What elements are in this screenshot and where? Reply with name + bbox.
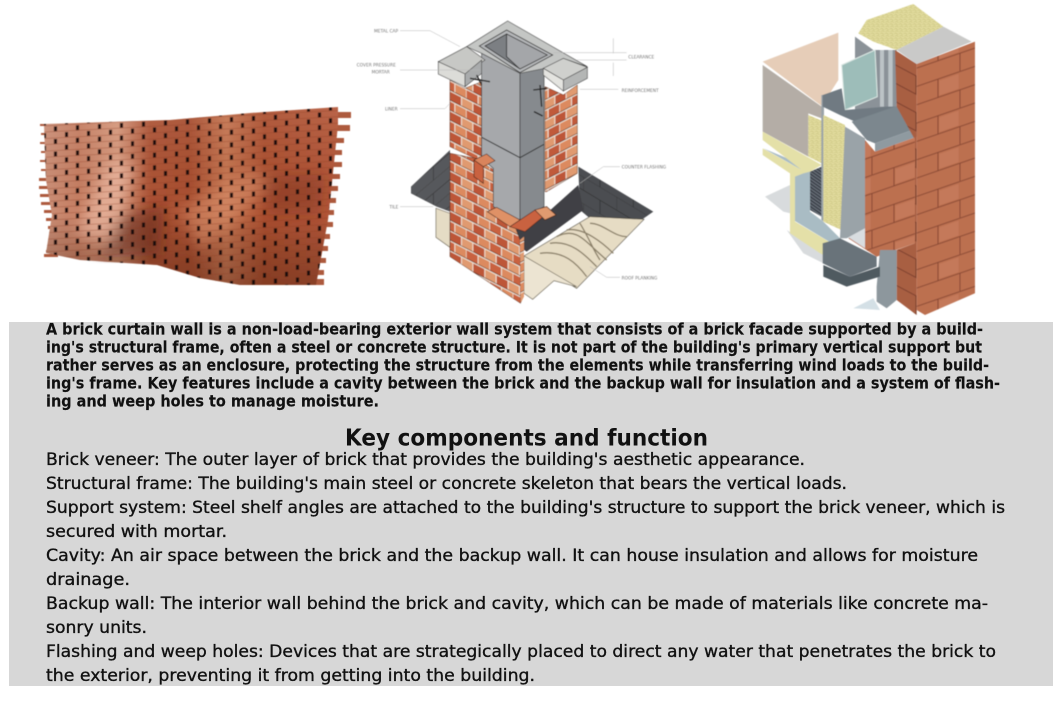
ventilation grille	[810, 167, 822, 217]
text panel background	[9, 322, 1053, 686]
wire ties	[470, 75, 547, 116]
flue opening	[479, 30, 553, 73]
concrete slab	[763, 65, 822, 157]
left pier	[450, 80, 482, 158]
intro paragraph: ing and weep holes to manage moisture.	[46, 392, 379, 410]
concrete top of brick	[897, 27, 972, 64]
lower shadow plane	[765, 185, 823, 263]
floor slab top	[763, 33, 838, 106]
component list: Structural frame: The building's main steel or concrete skeleton that bears the vertical loads.	[46, 474, 847, 494]
brick face right	[917, 42, 975, 315]
component list: sonry units.	[46, 618, 147, 638]
insulation back	[808, 115, 822, 163]
wood underside	[524, 256, 577, 299]
component list: Support system: Steel shelf angles are attached to the building's structure to support the brick veneer, which is	[46, 498, 1005, 518]
glazing	[842, 50, 893, 110]
component list: secured with mortar.	[46, 522, 227, 542]
callout labels: TILE	[388, 204, 399, 210]
dark step flashing	[515, 185, 583, 252]
wall shading	[44, 107, 338, 285]
lower ceiling insulation	[763, 132, 840, 263]
insulation main	[823, 115, 845, 232]
brick panel front	[848, 137, 915, 257]
wall body	[44, 107, 338, 285]
stepped bricks at base	[474, 154, 556, 232]
chimney cap	[438, 21, 587, 91]
intro paragraph: A brick curtain wall is a non-load-bearing exterior wall system that consists of a brick facade supported by a build-	[46, 320, 983, 338]
component list: drainage.	[46, 570, 130, 590]
lower shadow	[853, 298, 880, 310]
image: facade section with brick cladding	[763, 4, 975, 315]
component list	[46, 450, 1005, 686]
leader lines	[400, 31, 627, 277]
upper frame	[855, 37, 897, 122]
lower brick return	[520, 237, 524, 303]
component list: Backup wall: The interior wall behind the brick and cavity, which can be made of materials like concrete ma-	[46, 594, 988, 614]
callout labels	[357, 29, 666, 282]
callout labels: MORTAR	[372, 70, 390, 76]
ceiling panel	[763, 148, 840, 248]
steel angle	[848, 228, 865, 248]
lower brick face left	[450, 153, 521, 303]
callout labels: REINFORCEMENT	[622, 88, 659, 94]
steel strip	[821, 95, 824, 222]
wall edge teeth	[39, 112, 351, 285]
lower mullion	[823, 238, 897, 308]
flue right face	[520, 60, 544, 220]
intro paragraph	[46, 320, 1000, 410]
brick face left	[895, 50, 917, 315]
steel support	[840, 127, 865, 238]
roof insulation	[858, 4, 943, 50]
callout labels: ROOF PLANKING	[622, 276, 657, 282]
image: chimney construction detail	[357, 21, 666, 303]
flue joint	[482, 137, 544, 158]
heading: Key components and function: Key components and function	[345, 424, 708, 452]
callout labels: CLEARANCE	[628, 55, 654, 61]
frame bottom	[823, 88, 897, 122]
roof shingles left	[411, 150, 450, 212]
right pier	[545, 85, 577, 192]
callout labels: COUNTER FLASHING	[622, 165, 666, 171]
callout labels: COVER PRESSURE	[357, 63, 396, 69]
flue left face	[482, 53, 520, 220]
roof shingles right	[578, 167, 653, 223]
plywood deck	[524, 217, 644, 288]
callout labels: LINER	[385, 107, 398, 113]
component list: the exterior, preventing it from getting into the building.	[46, 666, 535, 686]
callout labels: METAL CAP	[374, 29, 399, 35]
component list: Flashing and weep holes: Devices that are strategically placed to direct any water that penetrates the brick to	[46, 642, 996, 662]
window sill	[852, 106, 922, 152]
image: undulating brick curtain wall	[39, 107, 351, 285]
left wood sheathing	[436, 208, 450, 247]
wall brick joints and holes	[44, 107, 338, 285]
component list: Cavity: An air space between the brick and the backup wall. It can house insulation and allows for moisture	[46, 546, 978, 566]
component list: Brick veneer: The outer layer of brick that provides the building's aesthetic appearance.	[46, 450, 805, 470]
wall highlight and shadow folds	[75, 160, 325, 258]
